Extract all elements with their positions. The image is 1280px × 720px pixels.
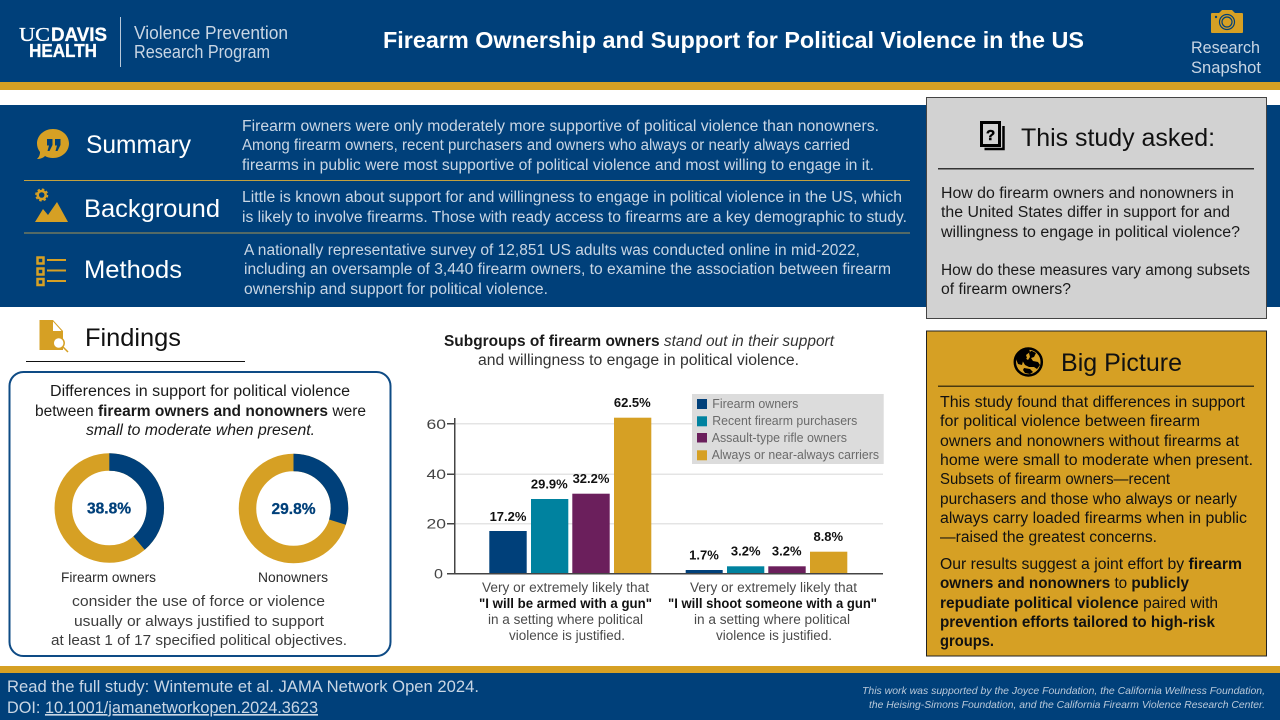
findings heading <box>26 320 245 362</box>
UC Davis Health logo: UC <box>19 24 50 46</box>
big picture text: home were small to moderate when present. <box>940 452 1253 469</box>
icon: speech bubble <box>37 129 69 159</box>
x label: shoot someone with a gun <box>668 580 877 643</box>
summary text: Among firearm owners, recent purchasers and owners who always or nearly always carried <box>242 137 850 154</box>
panel intro text: small to moderate when present. <box>86 422 315 439</box>
x label: shoot someone with a gun: violence is justified. <box>716 628 832 643</box>
icon: question documents <box>982 122 1004 149</box>
x label: armed with a gun: violence is justified. <box>509 628 625 643</box>
icon: sun and mountains <box>35 189 68 222</box>
bars: armed with a gun <box>489 418 651 574</box>
questions: of firearm owners? <box>941 281 1071 298</box>
program name <box>134 23 288 62</box>
research snapshot label <box>1191 39 1261 77</box>
program name: Violence Prevention <box>134 23 288 43</box>
big picture text: owners and nonowners without firearms at <box>940 433 1240 450</box>
donut label: nonowners: Nonowners <box>258 570 328 585</box>
bar value labels: 3.2% <box>731 544 761 559</box>
y axis labels: 40 <box>426 466 446 482</box>
big picture text: always carry loaded firearms when in public <box>940 510 1247 527</box>
UC Davis Health logo <box>19 24 107 61</box>
summary text: firearms in public were most supportive of political violence and most willing to engage in it. <box>242 157 874 174</box>
legend: Recent firearm purchasers <box>712 414 857 428</box>
heading: methods: Methods <box>84 256 182 284</box>
panel closing text: usually or always justified to support <box>74 613 325 630</box>
questions: the United States differ in support for and <box>941 204 1230 221</box>
background text <box>242 189 907 226</box>
citation <box>7 678 479 717</box>
research snapshot label: Snapshot <box>1191 59 1261 77</box>
methods text: A nationally representative survey of 12,851 US adults was conducted online in mid-2022, <box>244 242 860 259</box>
x label: armed with a gun <box>479 580 652 643</box>
questions: How do firearm owners and nonowners in <box>941 185 1234 202</box>
y axis labels: 60 <box>426 416 446 432</box>
bars: shoot someone with a gun <box>686 552 847 574</box>
panel: big picture <box>926 331 1266 656</box>
bar value labels: 3.2% <box>772 544 802 559</box>
donut: firearm owners 38.8%: 38.8% <box>87 500 131 518</box>
panel intro text: Differences in support for political violence <box>50 383 350 400</box>
footer <box>0 666 1280 720</box>
heading: background: Background <box>84 195 220 223</box>
chart heading: and willingness to engage in political violence. <box>478 352 799 369</box>
UC Davis Health logo: HEALTH <box>29 41 97 61</box>
y axis labels <box>426 416 446 582</box>
big picture text: Subsets of firearm owners—recent <box>940 471 1171 488</box>
header banner <box>0 0 1280 90</box>
panel: this study asked <box>926 98 1266 318</box>
panel: summary, background, methods <box>0 105 1280 307</box>
legend: Assault-type rifle owners <box>712 431 847 445</box>
panel intro text <box>35 383 366 439</box>
panel: firearm owners vs nonowners donuts <box>10 372 390 656</box>
funding note <box>862 685 1265 711</box>
legend: Firearm owners <box>712 397 798 411</box>
icon: camera <box>1211 10 1243 33</box>
legend <box>692 394 884 464</box>
heading: summary: Summary <box>86 131 191 159</box>
program name: Research Program <box>134 42 270 62</box>
heading: this study asked: This study asked: <box>1021 124 1215 152</box>
bar value labels: 1.7% <box>689 547 719 562</box>
icon: question documents: ? <box>986 127 995 144</box>
bar value labels: 8.8% <box>813 529 844 544</box>
citation: DOI: 10.1001/jamanetworkopen.2024.3623 <box>7 699 318 717</box>
summary text: Firearm owners were only moderately more supportive of political violence than nonowners. <box>242 118 879 135</box>
donut: firearm owners 38.8% <box>63 462 155 554</box>
bar value labels: 32.2% <box>573 471 610 486</box>
x label: armed with a gun: Very or extremely likely that <box>482 580 649 595</box>
methods text <box>244 242 891 298</box>
big picture text: purchasers and those who always or nearly <box>940 491 1237 508</box>
questions: How do these measures vary among subsets <box>941 262 1250 279</box>
big picture text: —raised the greatest concerns. <box>940 529 1157 546</box>
methods text: ownership and support for political violence. <box>244 281 548 298</box>
title: Firearm Ownership and Support for Political Violence in the US <box>383 27 1084 53</box>
citation: Read the full study: Wintemute et al. JAMA Network Open 2024. <box>7 678 479 696</box>
icon: globe <box>1015 348 1042 376</box>
big picture text: prevention efforts tailored to high-risk <box>940 614 1215 631</box>
chart heading <box>444 333 835 369</box>
research snapshot label: Research <box>1191 39 1260 57</box>
summary text <box>242 118 879 174</box>
panel closing text: at least 1 of 17 specified political objectives. <box>51 632 347 649</box>
donut: nonowners 29.8%: 29.8% <box>272 501 316 518</box>
big picture text: owners and nonowners to publicly <box>940 575 1189 592</box>
x label: shoot someone with a gun: in a setting where political <box>694 612 850 627</box>
big picture text <box>940 394 1253 650</box>
funding note: the Heising-Simons Foundation, and the California Firearm Violence Research Center. <box>869 699 1265 711</box>
funding note: This work was supported by the Joyce Foundation, the California Wellness Foundation, <box>862 685 1265 697</box>
bar value labels: 29.9% <box>531 476 568 491</box>
findings heading: Findings <box>85 324 181 352</box>
panel closing text <box>51 593 347 649</box>
big picture text: for political violence between firearm <box>940 413 1200 430</box>
y axis labels: 0 <box>434 566 443 582</box>
bar value labels: 17.2% <box>490 509 527 524</box>
x label: shoot someone with a gun: "I will shoot someone with a gun" <box>668 596 877 611</box>
big picture text: repudiate political violence paired with <box>940 595 1218 612</box>
x label: armed with a gun: in a setting where political <box>488 612 643 627</box>
donut label: firearm owners: Firearm owners <box>61 570 156 585</box>
chart heading: Subgroups of firearm owners stand out in their support <box>444 333 835 350</box>
UC Davis Health logo: DAVIS <box>51 25 107 46</box>
bar value labels: 62.5% <box>614 395 651 410</box>
questions <box>940 185 1250 298</box>
big picture text: Our results suggest a joint effort by firearm <box>940 556 1242 573</box>
y axis labels: 20 <box>426 516 446 532</box>
x label: shoot someone with a gun: Very or extremely likely that <box>690 580 857 595</box>
bar value labels <box>490 395 844 562</box>
heading: big picture: Big Picture <box>1061 349 1182 377</box>
background text: is likely to involve firearms. Those with ready access to firearms are a key demographic to study. <box>242 209 907 226</box>
background text: Little is known about support for and willingness to engage in political violence in the US, which <box>242 189 902 206</box>
icon: document with magnifier <box>40 320 68 352</box>
bar chart <box>426 394 884 643</box>
big picture text: groups. <box>940 633 994 650</box>
panel intro text: between firearm owners and nonowners were <box>35 403 366 420</box>
donut: nonowners 29.8% <box>248 462 340 554</box>
methods text: including an oversample of 3,440 firearm owners, to examine the association between firearm <box>244 261 891 278</box>
x label: armed with a gun: "I will be armed with a gun" <box>479 596 652 611</box>
icon: checklist <box>38 258 66 285</box>
legend: Always or near-always carriers <box>712 448 879 462</box>
panel closing text: consider the use of force or violence <box>72 593 325 610</box>
questions: willingness to engage in political violence? <box>940 224 1240 241</box>
big picture text: This study found that differences in support <box>940 394 1246 411</box>
